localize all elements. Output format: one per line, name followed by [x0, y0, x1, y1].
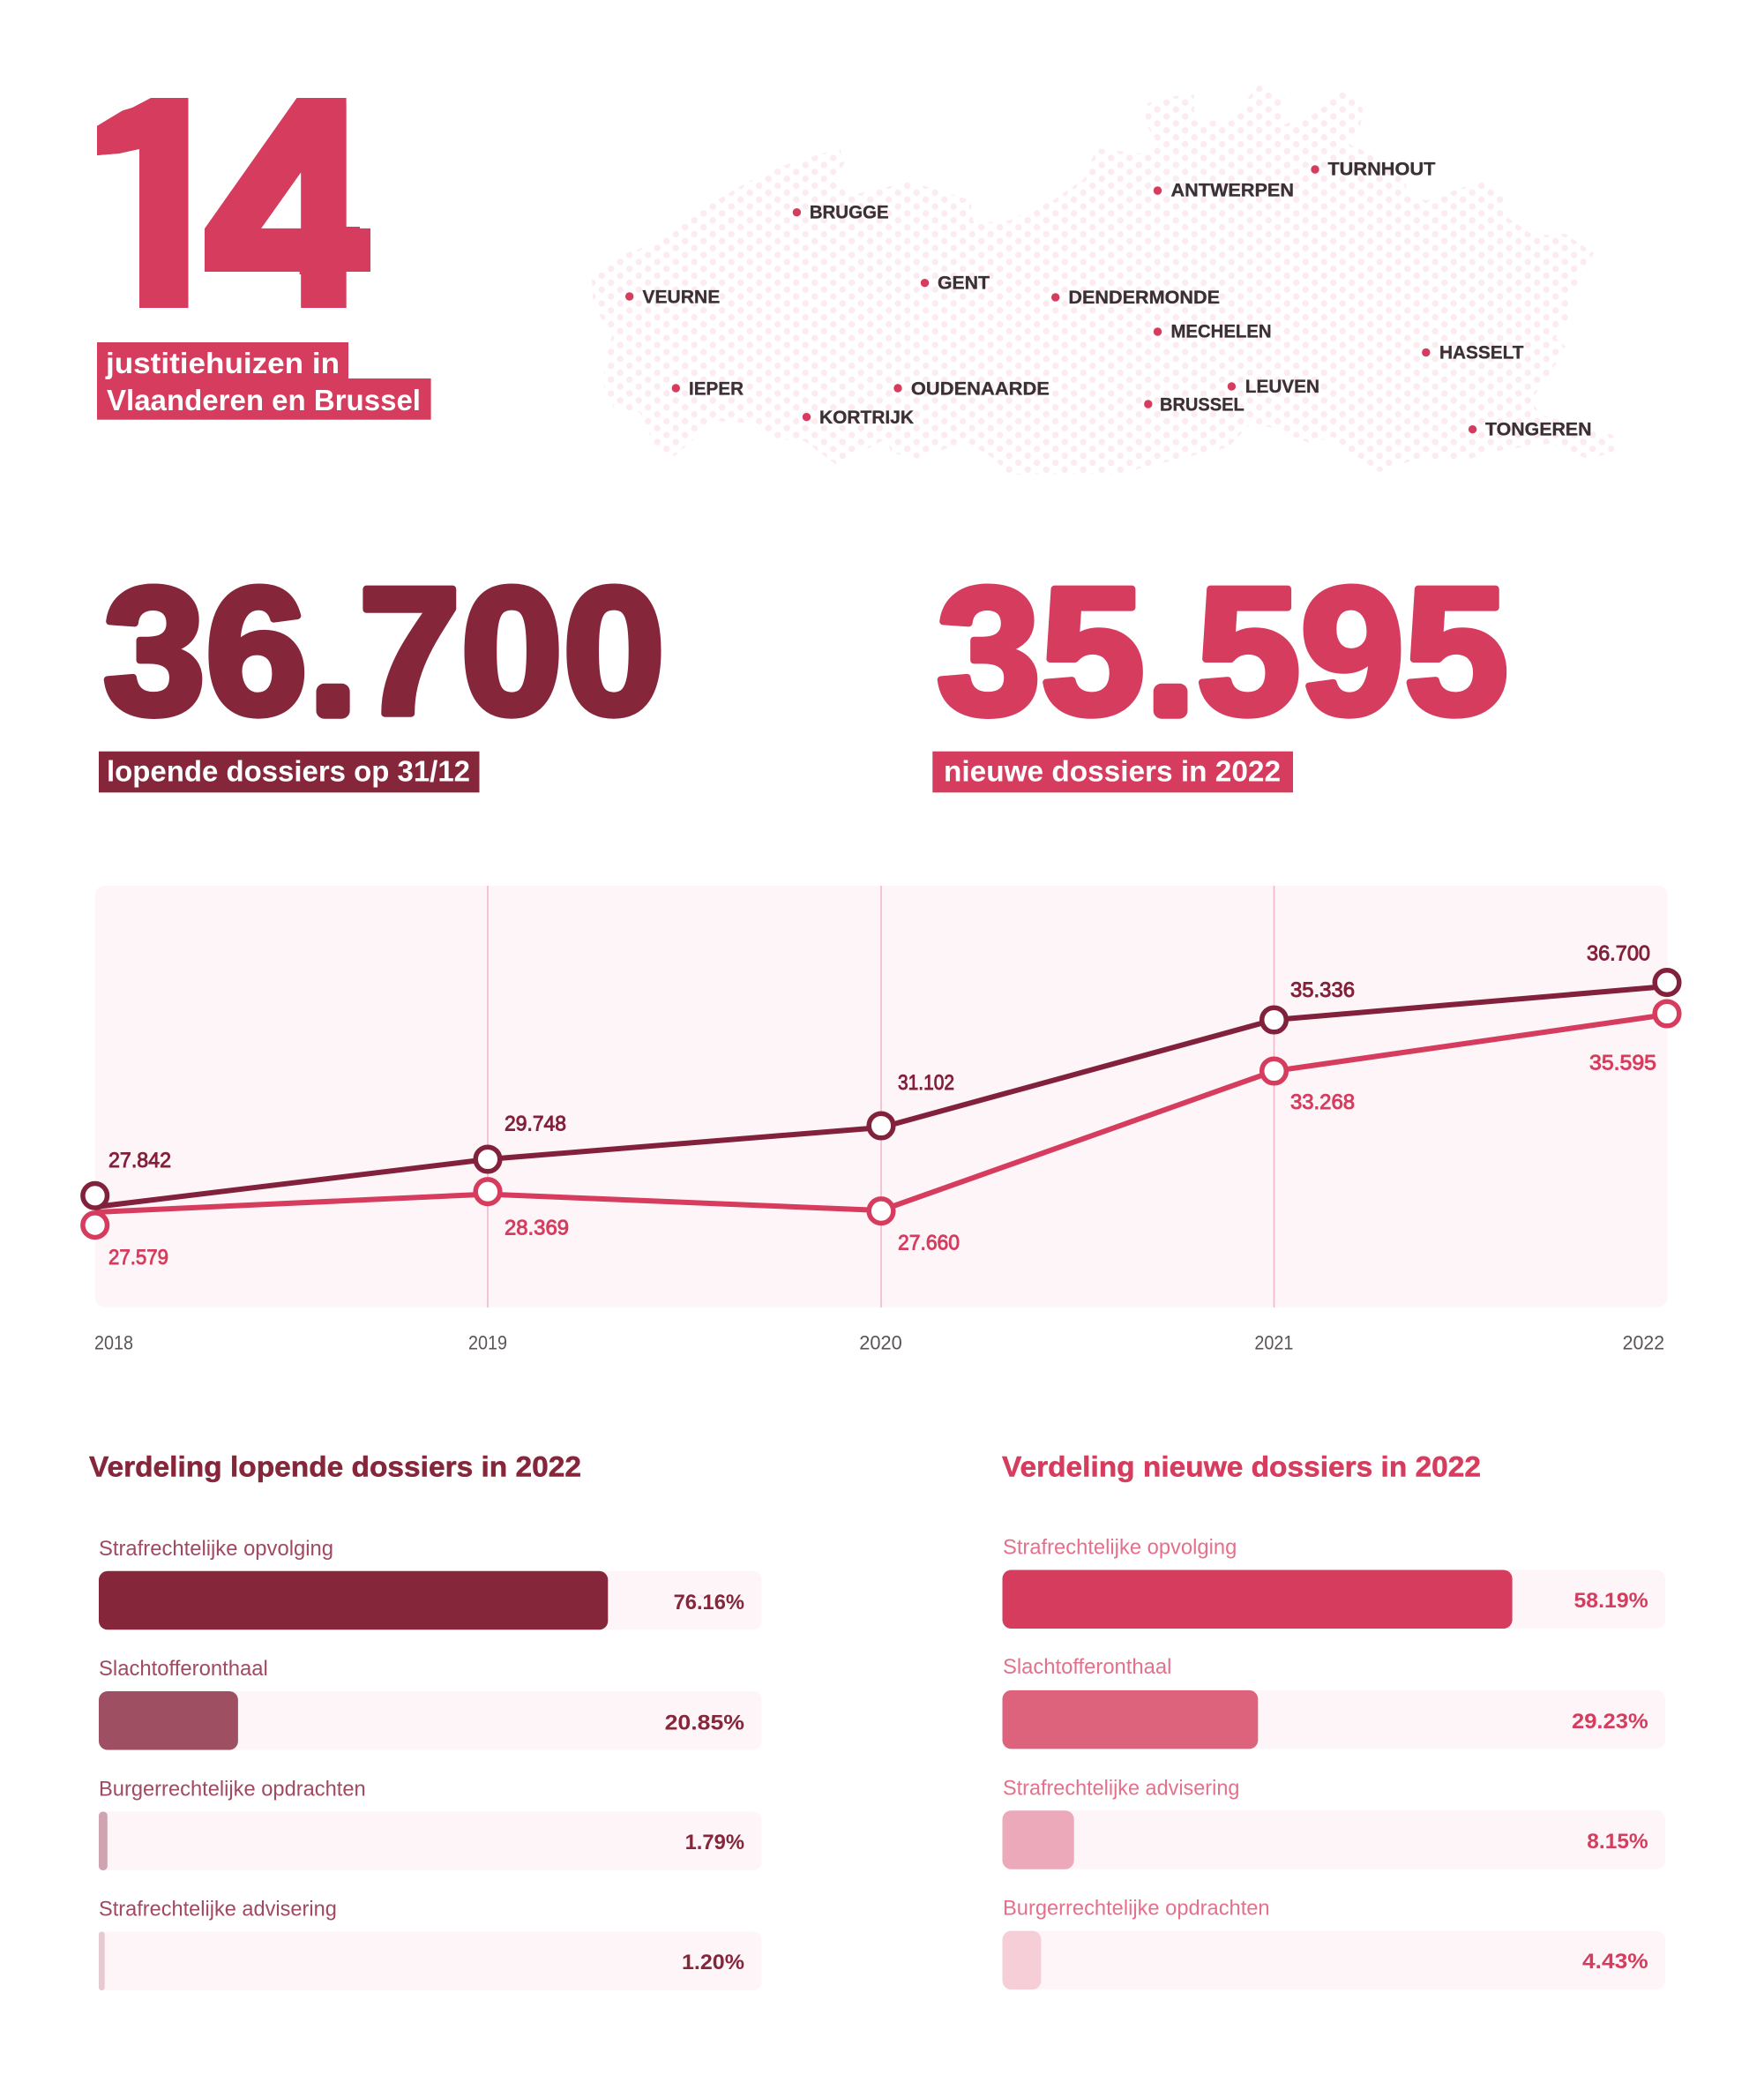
bar chart: verdeling lopende dossiers: [99, 1537, 762, 1990]
values: nieuwe dossiers: 28.369: [505, 1216, 569, 1240]
values: nieuwe dossiers: 27.660: [898, 1232, 960, 1255]
values: lopende dossiers: [108, 942, 1650, 1172]
city: Mechelen: MECHELEN: [1171, 322, 1272, 342]
big number: 14: 14: [71, 40, 385, 371]
markers: nieuwe dossiers: [83, 1001, 1679, 1237]
bar: Burgerrechtelijke opdrachten 1.79%: [99, 1777, 762, 1870]
bar chart: verdeling nieuwe dossiers: [1002, 1535, 1665, 1989]
bar: Strafrechtelijke advisering 1.20%: 1.20%: [682, 1951, 744, 1974]
values: nieuwe dossiers: 33.268: [1290, 1090, 1355, 1114]
bar: Slachtofferonthaal 20.85%: Slachtofferonthaal: [99, 1657, 268, 1681]
bar: Strafrechtelijke advisering 1.20%: [99, 1897, 762, 1990]
x axis years: 2019: [468, 1331, 507, 1353]
city: Turnhout: TURNHOUT: [1327, 159, 1436, 180]
heading: verdeling lopende dossiers: Verdeling lopende dossiers in 2022: [89, 1450, 581, 1482]
city: Dendermonde: DENDERMONDE: [1068, 288, 1220, 308]
bar: Slachtofferonthaal 20.85%: [99, 1657, 762, 1750]
big number: 35.595: 35: [937, 551, 1138, 753]
bar: Strafrechtelijke advisering 8.15%: Strafrechtelijke advisering: [1003, 1777, 1239, 1801]
bar: Strafrechtelijke advisering 8.15%: 8.15%: [1587, 1830, 1648, 1854]
x axis years: 2018: [94, 1331, 133, 1353]
heading: verdeling nieuwe dossiers: Verdeling nieuwe dossiers in 2022: [1002, 1450, 1481, 1482]
city: Gent: GENT: [938, 273, 990, 294]
bar: Slachtofferonthaal 29.23%: Slachtofferonthaal: [1003, 1655, 1171, 1679]
city: Leuven: LEUVEN: [1245, 377, 1319, 397]
line: nieuwe dossiers: [95, 1015, 1667, 1212]
label: lopende dossiers op 31/12: lopende dossiers op 31/12: [107, 755, 470, 787]
city: Brugge: BRUGGE: [810, 203, 889, 223]
x axis years: 2021: [1254, 1331, 1293, 1353]
values: lopende dossiers: 36.700: [1587, 942, 1650, 966]
big number: 36.700: 36: [103, 551, 304, 753]
values: lopende dossiers: 35.336: [1290, 978, 1355, 1002]
x axis years: [94, 1331, 1664, 1353]
map: dotted Flanders outline: [592, 82, 1614, 475]
bar: Burgerrechtelijke opdrachten 4.43%: [1002, 1897, 1665, 1989]
values: lopende dossiers: 27.842: [108, 1149, 171, 1172]
big number: 36.700: .: [308, 548, 359, 750]
bar: Burgerrechtelijke opdrachten 1.79%: Burgerrechtelijke opdrachten: [99, 1777, 366, 1801]
big number: 35.595: 595: [1197, 551, 1508, 753]
bar: Slachtofferonthaal 20.85%: 20.85%: [665, 1712, 744, 1734]
values: lopende dossiers: 29.748: [505, 1112, 566, 1135]
values: nieuwe dossiers: 35.595: [1589, 1052, 1656, 1075]
bar: Strafrechtelijke opvolging 76.16%: [99, 1537, 762, 1629]
bar: Strafrechtelijke advisering 1.20%: Strafrechtelijke advisering: [99, 1897, 337, 1921]
big number: 36.700: 700: [359, 551, 665, 753]
x axis years: 2020: [859, 1331, 902, 1353]
city: Hasselt: HASSELT: [1439, 342, 1524, 363]
city: Veurne: VEURNE: [642, 287, 720, 307]
label: justitiehuizen in Vlaanderen en Brussel: [97, 342, 431, 420]
city: Ieper: IEPER: [689, 378, 744, 399]
city: Antwerpen: ANTWERPEN: [1171, 180, 1294, 200]
city: Oudenaarde: OUDENAARDE: [911, 378, 1050, 399]
bar: Strafrechtelijke advisering 8.15%: [1002, 1777, 1665, 1869]
label: nieuwe dossiers in 2022: nieuwe dossiers in 2022: [944, 755, 1281, 787]
bar: Strafrechtelijke opvolging 76.16%: Strafrechtelijke opvolging: [99, 1537, 333, 1561]
line: lopende dossiers: [95, 986, 1667, 1207]
bar: Burgerrechtelijke opdrachten 4.43%: 4.43%: [1582, 1950, 1648, 1974]
values: nieuwe dossiers: [108, 1052, 1656, 1270]
bar: Slachtofferonthaal 29.23%: [1002, 1655, 1665, 1749]
bar: Strafrechtelijke opvolging 58.19%: Strafrechtelijke opvolging: [1003, 1535, 1237, 1559]
city: Kortrijk: KORTRIJK: [819, 408, 914, 428]
values: nieuwe dossiers: 27.579: [108, 1246, 168, 1270]
x axis years: 2022: [1623, 1331, 1664, 1353]
values: lopende dossiers: 31.102: [898, 1071, 954, 1095]
label: justitiehuizen in Vlaanderen en Brussel: Vlaanderen en Brussel: [107, 384, 421, 416]
label: justitiehuizen in Vlaanderen en Brussel: justitiehuizen in: [105, 347, 340, 379]
line chart: dossiers 2018-2022: [83, 886, 1679, 1353]
bar: Burgerrechtelijke opdrachten 4.43%: Burgerrechtelijke opdrachten: [1003, 1897, 1270, 1920]
bar: Burgerrechtelijke opdrachten 1.79%: 1.79%: [685, 1831, 744, 1854]
big number: 35.595: .: [1145, 548, 1197, 750]
bar: Strafrechtelijke opvolging 58.19%: [1002, 1535, 1665, 1629]
city: Brussel: BRUSSEL: [1160, 394, 1245, 415]
bar: Strafrechtelijke opvolging 58.19%: 58.19%: [1573, 1589, 1648, 1613]
markers: lopende dossiers: [83, 970, 1679, 1208]
bar: Strafrechtelijke opvolging 76.16%: 76.16%: [674, 1591, 744, 1614]
chart panel background: [95, 886, 1668, 1307]
city: Tongeren: TONGEREN: [1485, 420, 1592, 440]
bar: Slachtofferonthaal 29.23%: 29.23%: [1572, 1710, 1648, 1734]
